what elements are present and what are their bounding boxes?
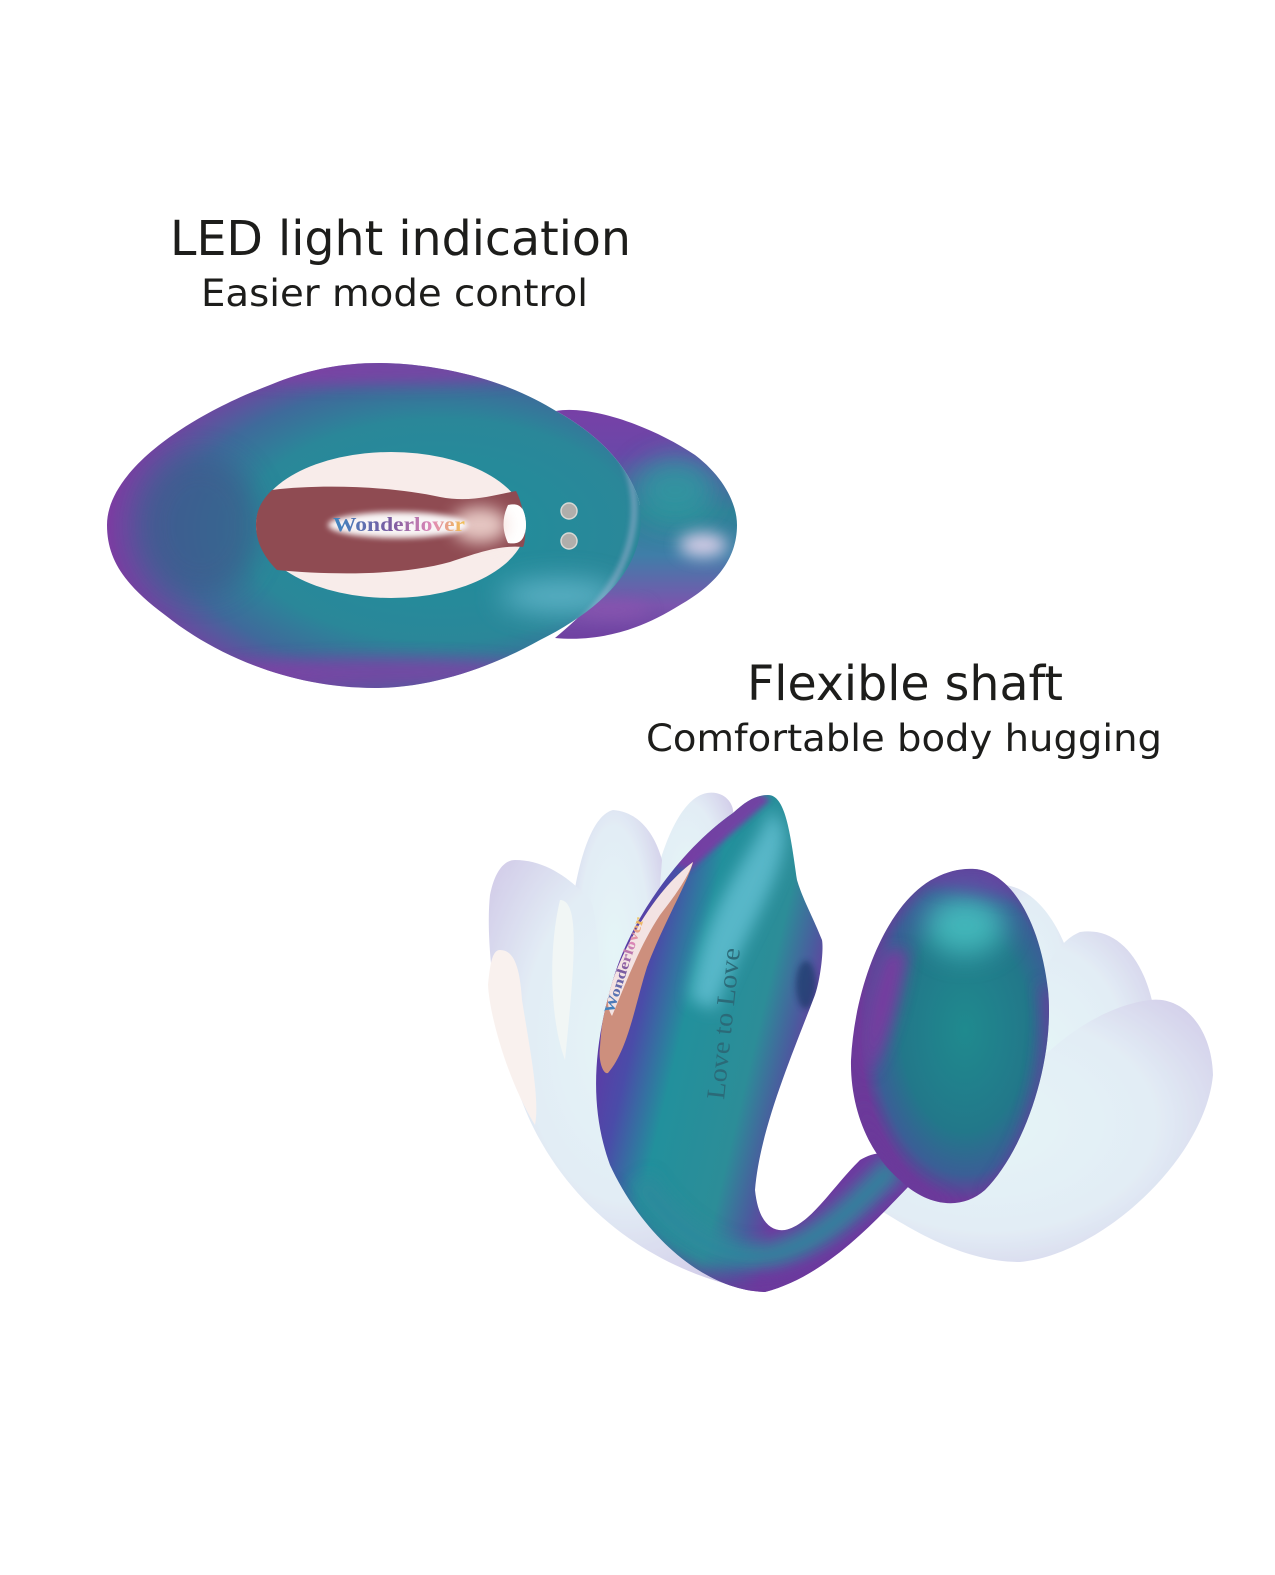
device illustration: top view bbox=[100, 350, 750, 695]
subtitle: Easier mode control: Easier mode control bbox=[201, 272, 588, 315]
rotated logo on side window: Wonderlover bbox=[603, 915, 648, 1015]
side window bbox=[600, 862, 693, 1073]
logo wordmark: Wonderlover bbox=[333, 514, 465, 536]
light panel window bbox=[256, 452, 526, 598]
ghost positions of shaft and bulb bbox=[488, 793, 1213, 1292]
rear lobe of device bbox=[555, 410, 737, 639]
indicator lights bbox=[561, 503, 577, 549]
device illustration: flex motion bbox=[488, 785, 1213, 1320]
title: LED light indication: LED light indication bbox=[170, 211, 631, 267]
curved body bbox=[596, 795, 908, 1292]
title: Flexible shaft: Flexible shaft bbox=[747, 656, 1063, 712]
egg-shaped bulb bbox=[850, 868, 1049, 1204]
front body of device bbox=[107, 363, 640, 688]
engraved brand text: Love to Love bbox=[701, 946, 746, 1101]
subtitle: Comfortable body hugging: Comfortable body hugging bbox=[646, 717, 1162, 760]
